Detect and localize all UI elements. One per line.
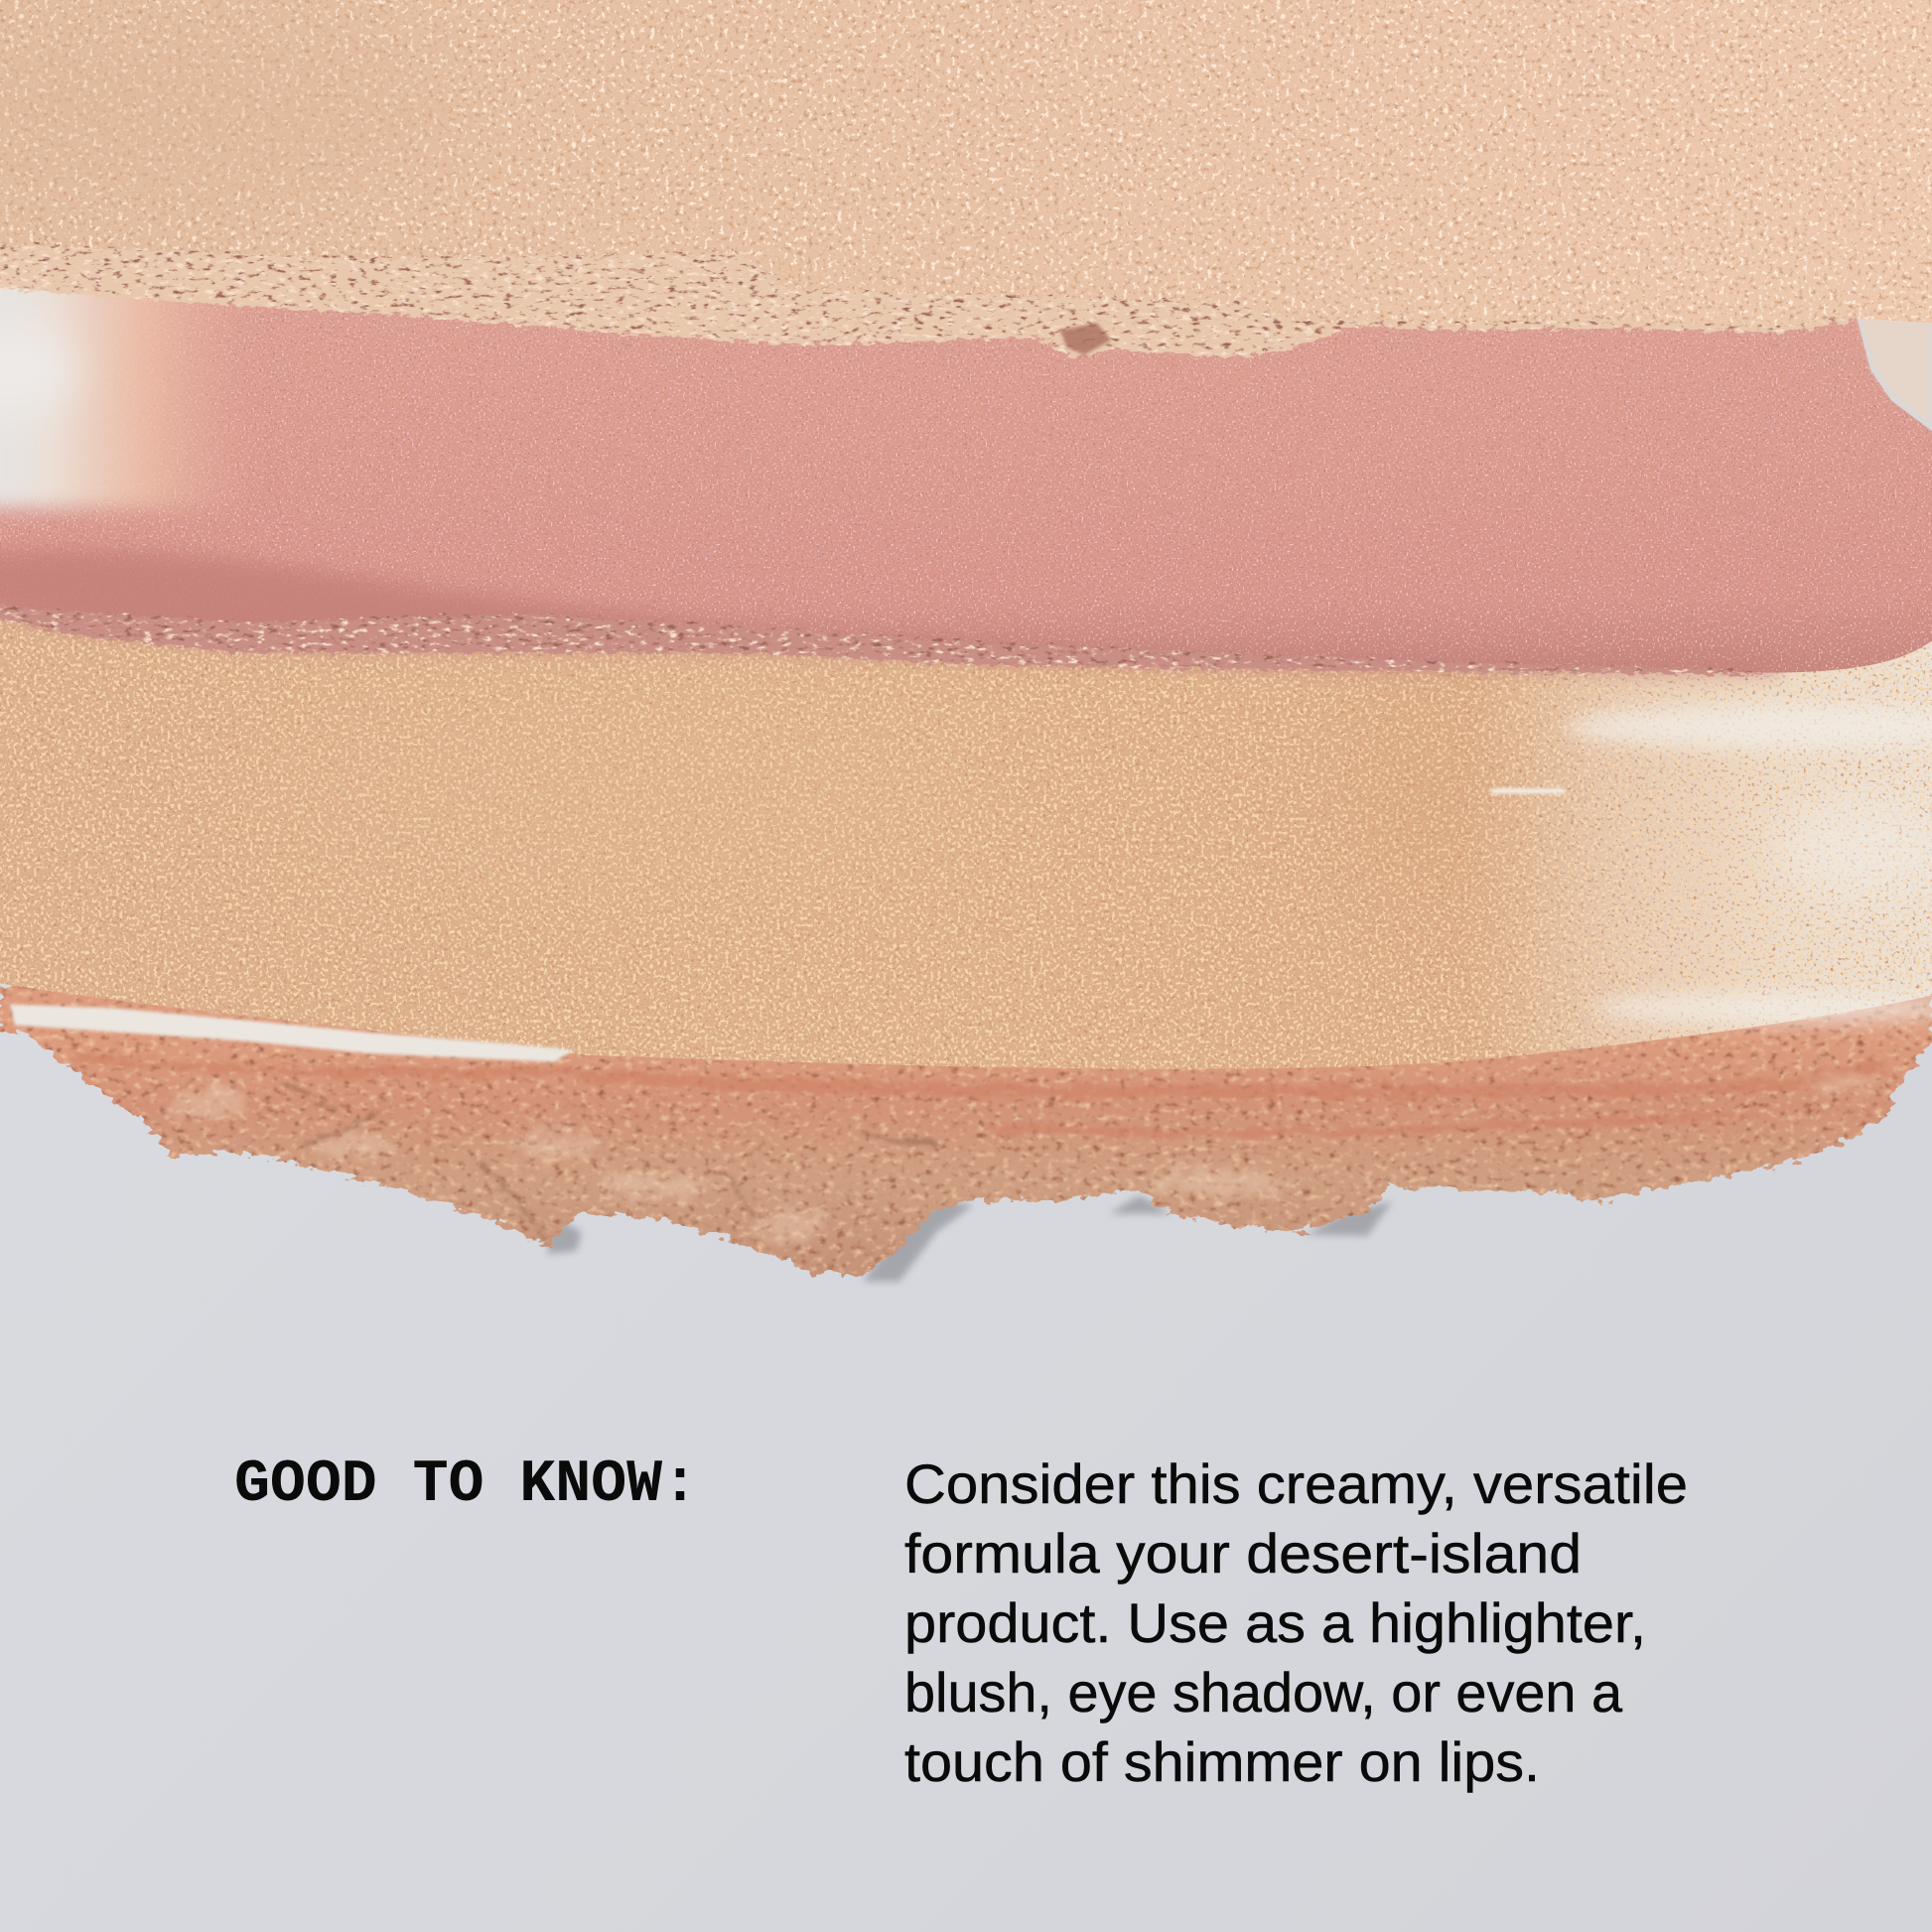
body text: touch of shimmer on lips. — [904, 1730, 1540, 1793]
white streak on gold — [10, 1004, 574, 1062]
cream highlights on crumbled edge — [170, 1075, 1867, 1241]
gold mottling — [246, 678, 1491, 924]
pink rim ridges — [0, 607, 1774, 675]
white left smear — [0, 327, 73, 413]
peach swatch — [0, 0, 1932, 357]
body text — [904, 1452, 1688, 1793]
body text: blush, eye shadow, or even a — [904, 1661, 1623, 1724]
gold swatch — [0, 579, 1932, 1069]
peach fill — [0, 0, 1932, 354]
body text: product. Use as a highlighter, — [904, 1591, 1646, 1654]
rust crumbled lower swatch — [0, 986, 1932, 1276]
drip shadows — [548, 1195, 1392, 1282]
peach mottling — [0, 12, 469, 209]
pink lower dark band — [0, 550, 1787, 673]
rust colour streaks — [73, 1057, 1885, 1133]
pink right pale edge — [1859, 308, 1932, 425]
gold right fade highlights — [1491, 705, 1932, 1023]
pink swatch — [0, 259, 1932, 675]
pink fill — [0, 283, 1932, 673]
peach lip — [0, 244, 1849, 357]
dark creases in crumbled edge — [285, 1084, 936, 1238]
pink left fade — [0, 259, 259, 507]
body text: Consider this creamy, versatile — [904, 1452, 1688, 1515]
body text: formula your desert-island — [904, 1522, 1582, 1585]
heading: good to know: GOOD TO KNOW: — [234, 1451, 698, 1519]
peach clump — [1059, 323, 1111, 354]
